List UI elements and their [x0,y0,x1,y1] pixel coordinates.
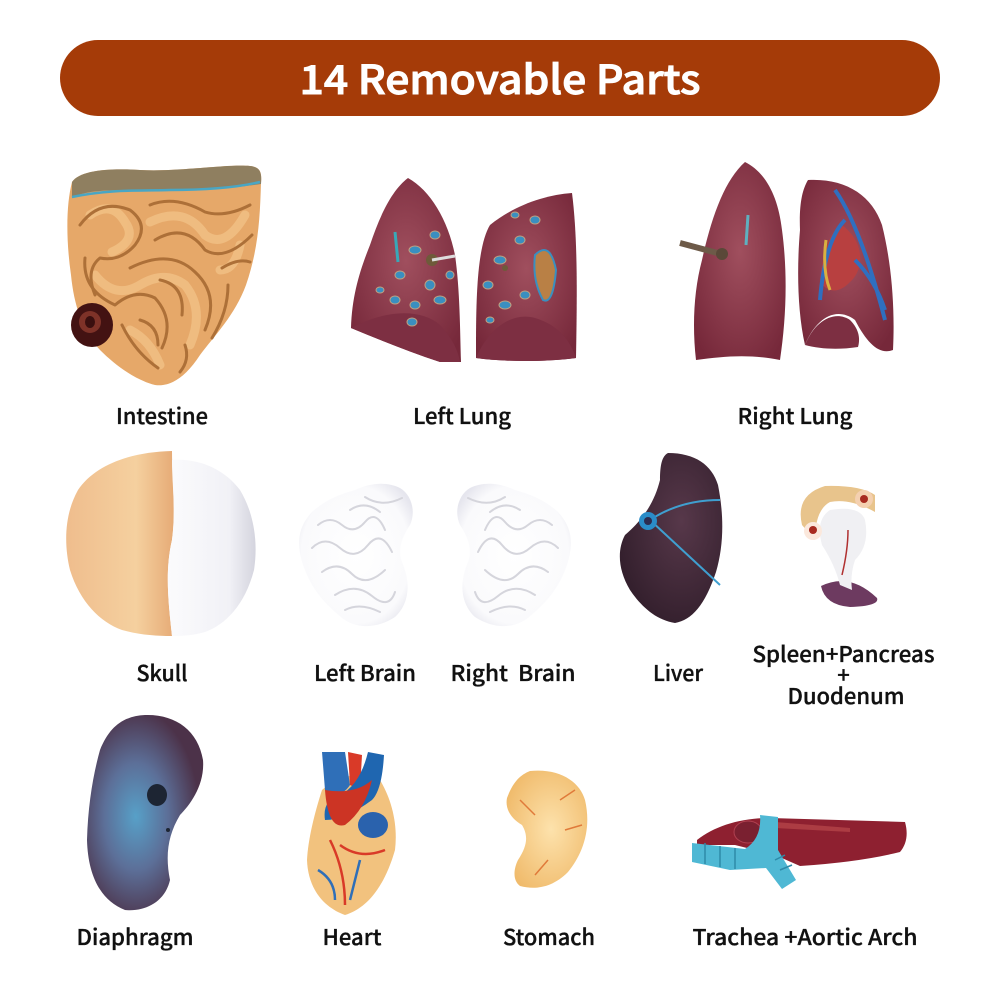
label: Diaphragm: Diaphragm [76,920,194,952]
label: Spleen+Pancreas + Duodenum: + [837,658,850,690]
title banner [60,40,940,116]
label: Liver: Liver [653,656,704,688]
organ: spleen pancreas duodenum [801,486,877,607]
organ: diaphragm [87,715,203,910]
organ: left brain [299,484,413,626]
organ: skull [66,451,256,636]
organ: left lung [351,178,577,362]
label: Stomach: Stomach [503,920,595,952]
organ: right brain [457,484,571,626]
label: Right Lung: Right Lung [738,399,853,431]
label: Skull: Skull [136,656,188,688]
label: Intestine: Intestine [116,399,208,431]
label: Right Brain: Right Brain [450,656,576,688]
label: Left Lung: Left Lung [413,399,511,431]
organ: stomach [507,771,587,888]
label: Spleen+Pancreas + Duodenum: Duodenum [788,679,904,711]
organ: trachea and aortic arch [692,815,907,889]
label: Trachea +Aortic Arch: Trachea +Aortic Arch [692,920,918,952]
title banner: 14 Removable Parts [300,48,700,106]
organ: liver [620,453,722,623]
label: Heart: Heart [322,920,382,952]
organ: heart [307,752,396,915]
organ: right lung [680,162,894,360]
label: Spleen+Pancreas + Duodenum: Spleen+Pancreas [753,637,935,669]
organ: intestine [67,166,261,385]
label: Left Brain: Left Brain [314,656,416,688]
